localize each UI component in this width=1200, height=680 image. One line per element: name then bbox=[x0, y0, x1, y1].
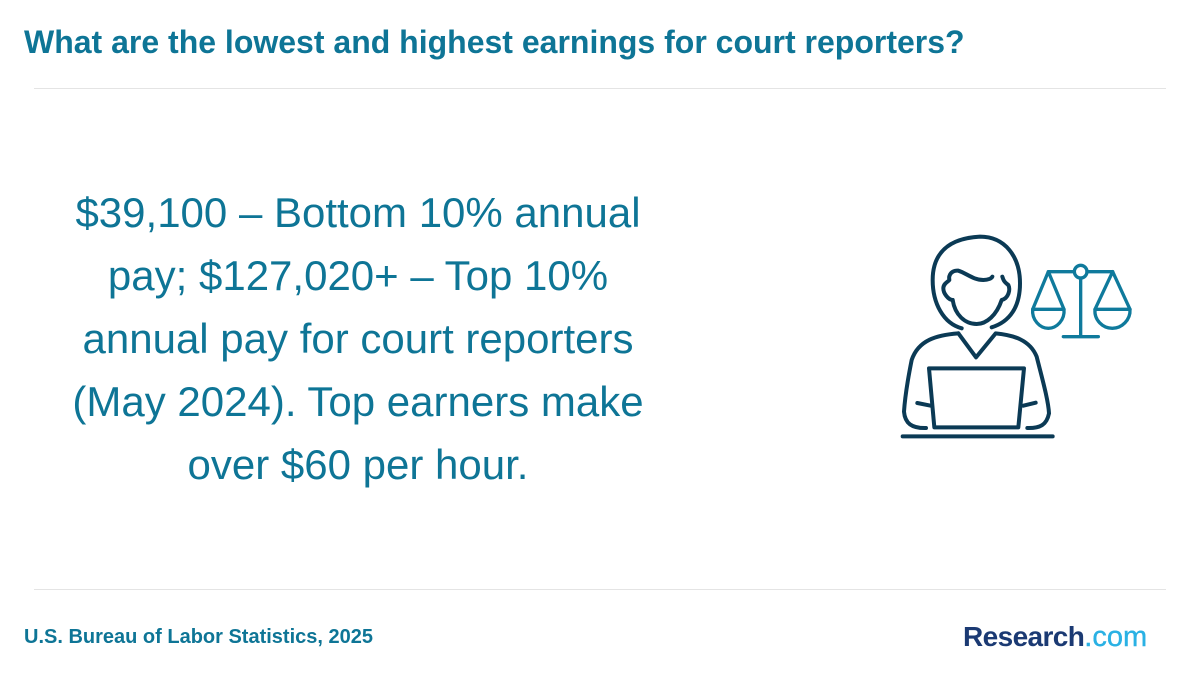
main statistic text: annual pay for court reporters bbox=[83, 315, 633, 362]
main statistic text: $39,100 – Bottom 10% annual bbox=[75, 189, 641, 236]
title: What are the lowest and highest earnings for court reporters? bbox=[24, 24, 965, 60]
main statistic text bbox=[72, 189, 644, 488]
logo: Research.com: Research.com bbox=[963, 621, 1147, 653]
icon: scales of justice bbox=[1033, 265, 1130, 337]
main statistic text: (May 2024). Top earners make bbox=[72, 378, 644, 425]
icon: person at laptop bbox=[903, 237, 1053, 436]
main statistic text: over $60 per hour. bbox=[188, 441, 528, 488]
icon: court reporter at laptop with scales of justice bbox=[900, 234, 1132, 438]
main statistic text: pay; $127,020+ – Top 10% bbox=[108, 252, 608, 299]
source citation: U.S. Bureau of Labor Statistics, 2025 bbox=[24, 626, 373, 648]
